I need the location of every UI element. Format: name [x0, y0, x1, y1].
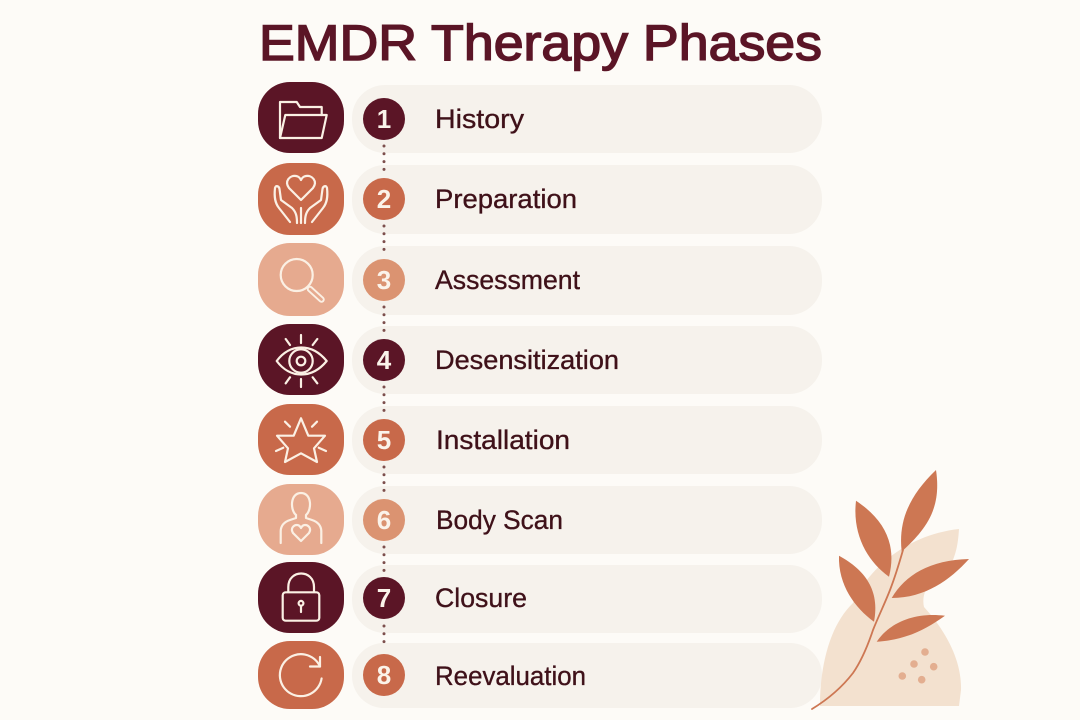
background blob — [820, 529, 961, 706]
number badge — [363, 259, 405, 301]
label: Installation — [436, 425, 570, 455]
number badge — [363, 339, 405, 381]
label pill — [352, 406, 822, 474]
number: 8 — [377, 660, 391, 690]
label: Desensitization — [435, 345, 619, 375]
botanical illustration — [812, 470, 969, 709]
number badge — [363, 98, 405, 140]
icon: circular arrow — [280, 654, 322, 696]
label pill — [352, 85, 822, 153]
label: Closure — [435, 583, 527, 613]
label pill — [352, 486, 822, 554]
phase 5: Installation — [258, 404, 822, 475]
icon tile — [258, 484, 344, 555]
label: Body Scan — [436, 505, 563, 535]
icon: padlock — [283, 574, 319, 621]
icon tile — [258, 243, 344, 316]
icon: body with heart — [281, 493, 321, 543]
icon tile — [258, 404, 344, 475]
icon: folder — [280, 102, 327, 138]
icon: star — [276, 418, 326, 462]
number badge — [363, 577, 405, 619]
number badge — [363, 654, 405, 696]
icon tile — [258, 562, 344, 633]
number badge — [363, 499, 405, 541]
label pill — [352, 565, 822, 633]
number: 1 — [377, 104, 391, 134]
number: 3 — [377, 265, 391, 295]
number badge — [363, 419, 405, 461]
dotted connector between steps — [382, 146, 386, 649]
phase 1: History — [258, 82, 822, 153]
icon tile — [258, 641, 344, 709]
title: EMDR Therapy Phases — [259, 15, 822, 71]
number badge — [363, 178, 405, 220]
icon: magnifying glass — [281, 259, 322, 300]
label: Preparation — [435, 184, 577, 214]
phase 6: Body Scan — [258, 484, 822, 555]
number: 2 — [377, 184, 391, 214]
decorative dots — [898, 648, 938, 684]
icon tile — [258, 82, 344, 153]
label pill — [352, 165, 822, 234]
phase 8: Reevaluation — [258, 641, 822, 709]
icon tile — [258, 163, 344, 235]
label: Reevaluation — [435, 661, 586, 691]
number: 6 — [377, 505, 391, 535]
leaves — [839, 470, 969, 642]
number: 7 — [377, 583, 391, 613]
number: 5 — [377, 425, 391, 455]
stem — [812, 550, 903, 709]
phase 2: Preparation — [258, 163, 822, 235]
icon tile — [258, 324, 344, 395]
label pill — [352, 246, 822, 315]
label: Assessment — [435, 265, 580, 295]
phase 7: Closure — [258, 562, 822, 633]
phase 4: Desensitization — [258, 324, 822, 395]
icon: hands holding heart — [275, 176, 327, 223]
icon: eye — [277, 335, 327, 387]
label pill — [352, 643, 822, 708]
label: History — [435, 104, 525, 134]
number: 4 — [377, 345, 392, 375]
label pill — [352, 326, 822, 394]
phase 3: Assessment — [258, 243, 822, 316]
